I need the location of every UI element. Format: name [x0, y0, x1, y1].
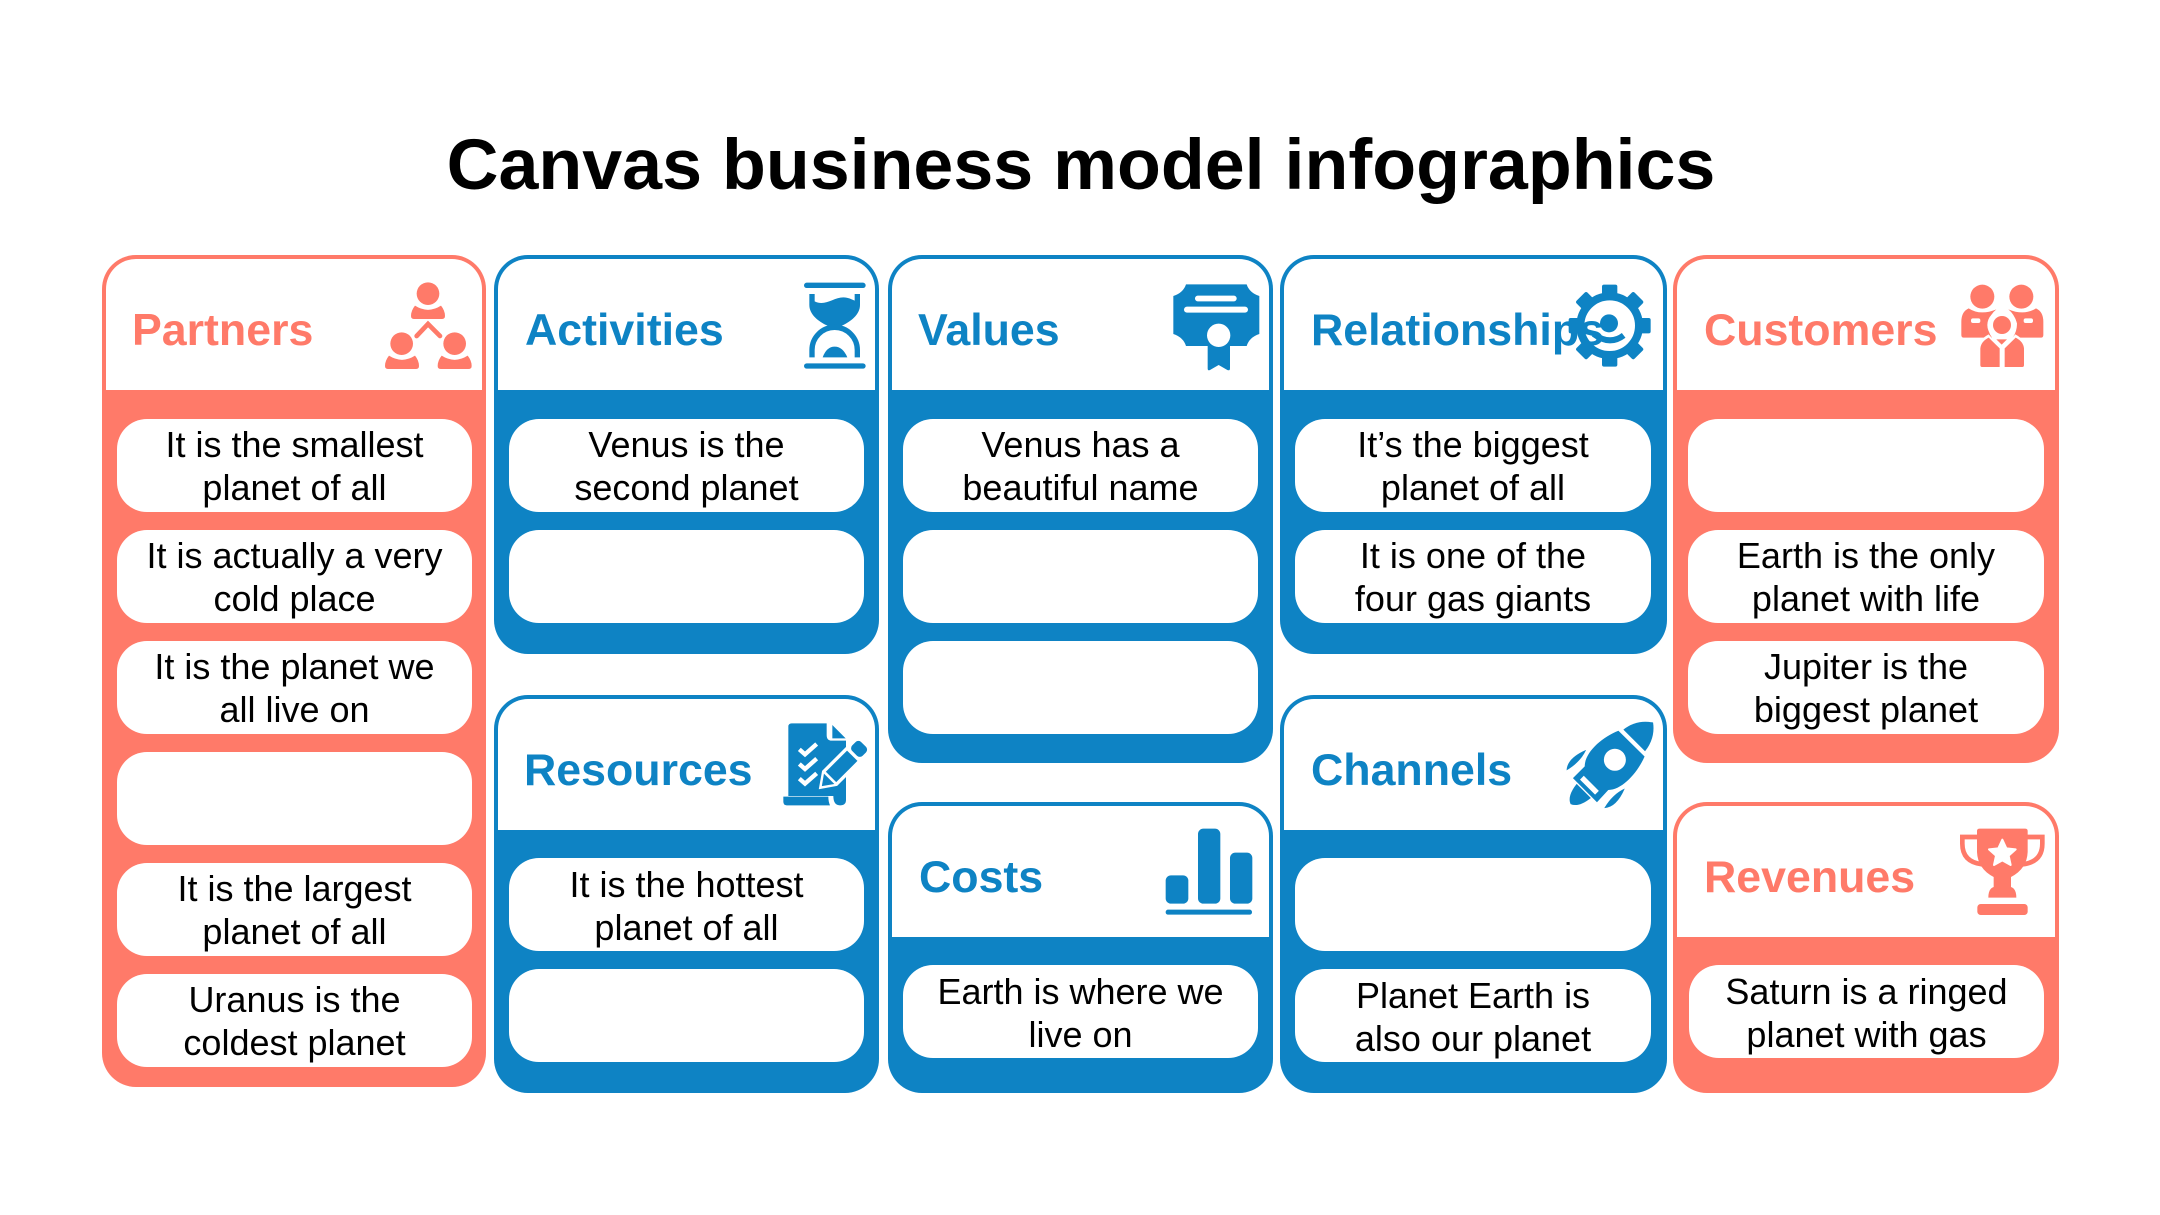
text pill 2: four gas giants	[1355, 578, 1591, 619]
empty pill 3	[903, 641, 1258, 734]
empty pill 2	[509, 530, 864, 622]
text pill 1: beautiful name	[962, 467, 1199, 508]
text pill 2	[1688, 530, 2044, 622]
text pill 1: It is the hottest	[569, 864, 804, 905]
text pill 2: cold place	[213, 578, 376, 619]
text pill 1	[117, 418, 472, 512]
heading: values: Values	[918, 306, 1060, 355]
text pill 1	[509, 418, 864, 512]
heading: relationships: Relationships	[1311, 306, 1604, 355]
resources header background	[498, 699, 875, 830]
icon: gear with person	[1568, 284, 1651, 367]
panel: revenues	[1673, 802, 2059, 1093]
heading: partners: Partners	[132, 306, 313, 355]
heading: revenues: Revenues	[1704, 853, 1915, 902]
partners header background	[106, 259, 482, 390]
text pill 6: coldest planet	[183, 1022, 406, 1063]
text pill 1: planet with gas	[1746, 1014, 1987, 1055]
text pill 2	[1295, 969, 1651, 1062]
text pill 3: Jupiter is the	[1764, 646, 1968, 687]
text pill 1	[1295, 418, 1651, 512]
text pill 1	[903, 418, 1258, 512]
icon: group of people	[1961, 284, 2044, 367]
icon: certificate	[1173, 284, 1260, 370]
relationships header background	[1284, 259, 1663, 390]
text pill 1: Earth is where we	[937, 971, 1224, 1012]
text pill 1	[903, 965, 1258, 1058]
panel: values	[888, 255, 1273, 763]
text pill 1: planet of all	[594, 907, 779, 948]
heading: activities: Activities	[525, 306, 724, 355]
empty pill 2	[903, 530, 1258, 622]
icon: rocket	[1566, 722, 1654, 808]
text pill 2: It is actually a very	[146, 534, 443, 576]
text pill 1: live on	[1028, 1014, 1133, 1055]
text pill 1: planet of all	[202, 467, 387, 508]
text pill 2: Planet Earth is	[1356, 975, 1590, 1016]
text pill 2: It is one of the	[1360, 534, 1586, 576]
text pill 5: planet of all	[202, 911, 387, 952]
heading: channels: Channels	[1311, 746, 1512, 795]
revenues header background	[1677, 806, 2055, 937]
text pill 1: It’s the biggest	[1357, 424, 1589, 464]
heading: resources: Resources	[524, 746, 753, 795]
icon: three connected people	[385, 282, 472, 369]
empty pill 1	[1295, 858, 1651, 951]
text pill 5	[117, 863, 472, 956]
title: Canvas business model infographics	[447, 125, 1715, 205]
icon: trophy	[1960, 828, 2045, 915]
customers header background	[1677, 259, 2055, 390]
text pill 6: Uranus is the	[188, 979, 401, 1020]
text pill 1	[509, 858, 864, 951]
activities header background	[498, 259, 875, 390]
panel: costs	[888, 802, 1273, 1093]
icon: bar chart	[1166, 828, 1252, 915]
text pill 2	[117, 530, 472, 622]
costs header background	[892, 806, 1269, 937]
empty pill 1	[1688, 418, 2044, 512]
channels header background	[1284, 699, 1663, 830]
text pill 1: Venus is the	[588, 424, 785, 464]
text pill 1: planet of all	[1381, 467, 1565, 508]
text pill 1: second planet	[574, 467, 799, 508]
icon: hourglass	[804, 282, 866, 369]
panel: customers	[1673, 255, 2059, 763]
text pill 3: It is the planet we	[154, 646, 435, 687]
icon: checklist with pencil	[783, 723, 868, 806]
values header background	[892, 259, 1269, 390]
empty pill 2	[509, 969, 864, 1062]
text pill 3	[1688, 641, 2044, 734]
text pill 2: also our planet	[1355, 1018, 1591, 1059]
text pill 5: It is the largest	[177, 868, 412, 909]
text pill 2	[1295, 530, 1651, 622]
text pill 3: all live on	[219, 689, 370, 730]
panel: relationships	[1280, 255, 1667, 654]
text pill 1	[1689, 965, 2044, 1058]
empty pill 4	[117, 752, 472, 845]
panel: channels	[1280, 695, 1667, 1093]
heading: customers: Customers	[1704, 306, 1937, 355]
panel: resources	[494, 695, 879, 1093]
text pill 1: Saturn is a ringed	[1725, 971, 2008, 1012]
text pill 3: biggest planet	[1754, 689, 1978, 730]
panel: partners	[102, 255, 486, 1087]
text pill 1: Venus has a	[981, 424, 1180, 464]
text pill 1: It is the smallest	[165, 424, 424, 464]
panel: activities	[494, 255, 879, 654]
text pill 6	[117, 974, 472, 1067]
heading: costs: Costs	[919, 853, 1043, 902]
text pill 2: planet with life	[1752, 578, 1980, 619]
text pill 3	[117, 641, 472, 734]
text pill 2: Earth is the only	[1737, 534, 1995, 576]
